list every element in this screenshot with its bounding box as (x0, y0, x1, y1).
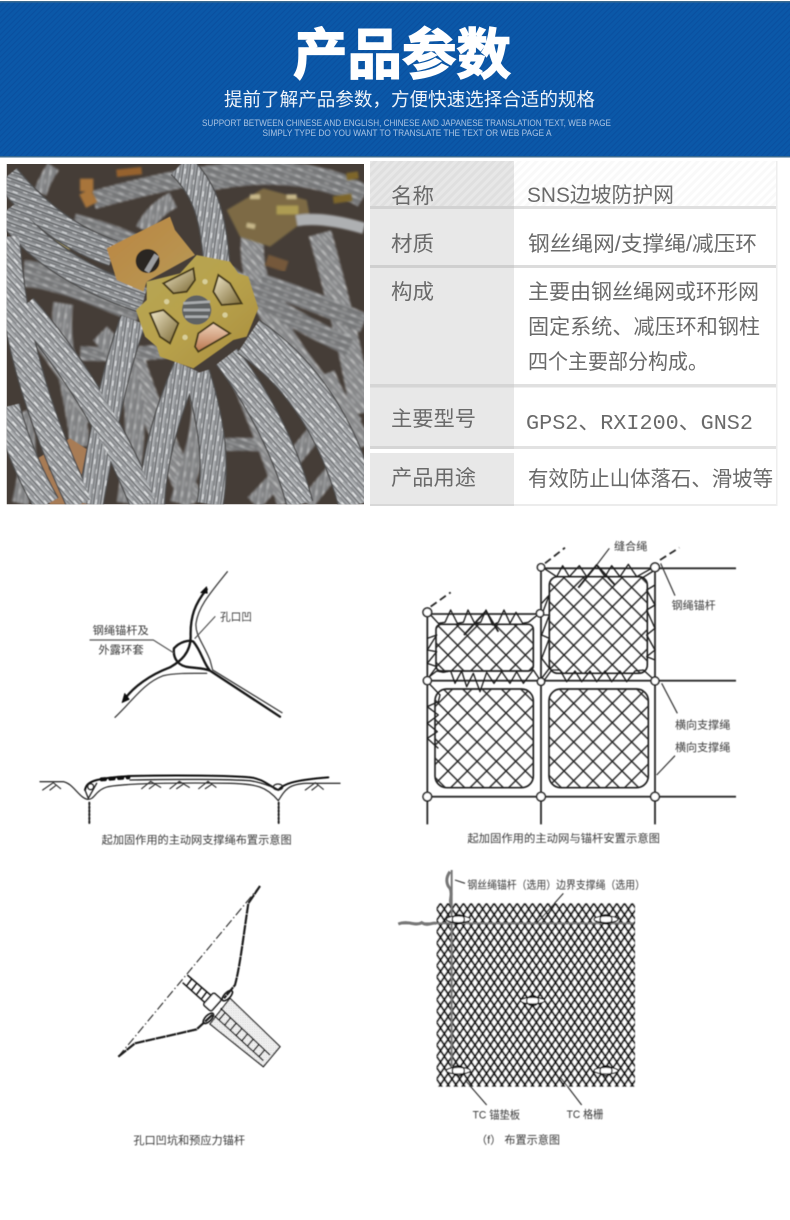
english text line 2: SIMPLY TYPE DO YOU WANT TO TRANSLATE THE TEXT OR WEB PAGE A (262, 128, 552, 138)
row: 构成: 构成 (391, 281, 434, 304)
dark blurred background cables (7, 167, 364, 503)
product photo: wire rope net with clamp plate (7, 164, 364, 504)
diagram: orifice pit and prestressed anchor (118, 886, 280, 1147)
slope line (118, 886, 260, 1057)
labels: 缝合绳 (614, 539, 647, 553)
row: 构成: 固定系统、减压环和钢柱 (528, 316, 760, 339)
knot labels: 外露环套 (98, 643, 144, 656)
parameter table (370, 161, 778, 506)
bottom-left clamp plate (38, 438, 87, 504)
labels: 起加固作用的主动网与锚杆安置示意图 (467, 831, 660, 845)
labels: 横向支撑绳 (675, 717, 730, 731)
back clamp plate (107, 217, 195, 292)
row: 主要型号 (370, 384, 777, 447)
knot labels: 钢绳锚杆及 (93, 623, 149, 637)
support ropes grid (427, 548, 736, 824)
row: 产品用途: 有效防止山体落石、滑坡等 (528, 468, 773, 491)
labels: TC 格栅 (567, 1107, 603, 1121)
row: 主要型号: GPS2、RXI200、GNS2 (526, 413, 753, 436)
dense grid mesh (437, 903, 635, 1087)
row: 构成 (370, 265, 777, 386)
english text line 1: SUPPORT BETWEEN CHINESE AND ENGLISH, CHINESE AND JAPANESE TRANSLATION TEXT, WEB PAGE (202, 118, 611, 128)
ground profile and rope (40, 776, 340, 823)
rope knot illustration (90, 572, 282, 717)
labels: TC 锚垫板 (473, 1108, 520, 1122)
heading: 产品参数: 产品参数 (293, 24, 511, 86)
row: 材质: 钢丝绳网/支撑绳/减压环 (528, 233, 757, 256)
diagram: anchor knot and support rope layout (40, 572, 340, 846)
seam rope zigzags (427, 564, 655, 748)
row: 主要型号: 主要型号 (391, 408, 476, 431)
row: 名称: 名称 (391, 185, 434, 208)
anchor rod (183, 975, 270, 1061)
knot labels: 孔口凹 (220, 611, 252, 624)
border ropes (398, 870, 633, 1071)
anchor nodes (423, 563, 659, 801)
diagram: TC grid layout (398, 870, 645, 1146)
row: 构成: 主要由钢丝绳网或环形网 (528, 281, 759, 304)
diagram: net panel and anchor layout (423, 539, 736, 845)
grout body (210, 998, 280, 1067)
front clamp plate (136, 255, 258, 368)
header banner (0, 1, 790, 158)
row: 名称: SNS边坡防护网 (527, 184, 674, 207)
row: 产品用途 (370, 446, 777, 506)
labels (467, 539, 730, 845)
leader lines (597, 548, 677, 775)
blurred golden details in the background (23, 171, 364, 267)
row: 材质 (370, 206, 777, 267)
foreground wire ropes (7, 165, 358, 504)
subtitle: 提前了解产品参数，方便快速选择合适的规格 (224, 89, 595, 110)
knot labels (93, 611, 252, 656)
TC anchor plates (446, 915, 618, 1076)
caption: 起加固作用的主动网支撑绳布置示意图 (102, 832, 292, 846)
labels (467, 878, 645, 1146)
row: 名称 (370, 161, 777, 208)
row: 材质: 材质 (391, 233, 434, 256)
labels: 钢绳锚杆 (672, 598, 716, 612)
labels: 横向支撑绳 (675, 740, 730, 754)
labels: 钢丝绳锚杆（选用）边界支撑绳（选用） (467, 878, 645, 892)
caption: 孔口凹坑和预应力锚杆 (133, 1133, 245, 1147)
row: 产品用途: 产品用途 (391, 467, 476, 490)
leader lines (455, 880, 582, 1105)
labels: （f） 布置示意图 (476, 1132, 560, 1146)
row: 构成: 四个主要部分构成。 (528, 351, 708, 374)
mesh panels (435, 577, 648, 788)
pit outline (118, 886, 260, 1057)
